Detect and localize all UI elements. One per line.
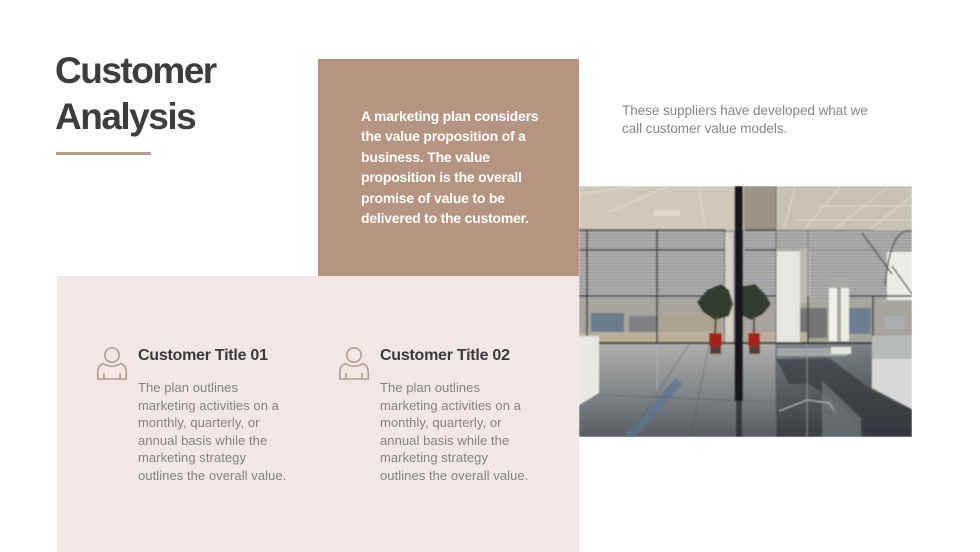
panel: value proposition	[318, 59, 579, 276]
card body 02: annual basis while the	[380, 432, 509, 448]
card body 01: outlines the overall value.	[138, 468, 286, 482]
icon: person 01	[97, 347, 127, 380]
supplier description: call customer value models.	[622, 120, 787, 136]
value proposition text: A marketing plan considers	[361, 108, 538, 124]
panel: pale background	[57, 276, 579, 552]
ceiling	[579, 186, 745, 231]
card heading 01: Customer Title 01	[138, 346, 268, 364]
photo: office lobby	[579, 186, 912, 437]
window frames	[579, 230, 912, 343]
window blinds	[579, 230, 912, 343]
title: Analysis	[55, 96, 195, 137]
value proposition text: delivered to the customer.	[361, 210, 529, 226]
title underline	[56, 152, 151, 155]
left and right desks	[579, 336, 599, 405]
card body 01	[138, 380, 286, 482]
card body 01: annual basis while the	[138, 432, 267, 448]
card body 02: outlines the overall value.	[380, 468, 528, 482]
plants	[697, 284, 733, 320]
card body 02: monthly, quarterly, or	[380, 415, 502, 430]
icon: person 02	[339, 347, 369, 380]
black column	[734, 186, 743, 401]
card: customer 01	[97, 346, 286, 482]
outdoor view	[591, 313, 624, 335]
card body 02	[380, 380, 528, 482]
card heading 02: Customer Title 02	[380, 346, 510, 364]
value proposition text: business. The value	[361, 149, 490, 165]
value proposition text: promise of value to be	[361, 190, 505, 206]
card body 01: marketing activities on a	[138, 398, 279, 412]
card body 02: marketing activities on a	[380, 398, 521, 412]
supplier description: These suppliers have developed what we	[622, 103, 868, 118]
value proposition text: proposition is the overall	[361, 169, 522, 185]
value proposition text: the value proposition of a	[361, 128, 526, 144]
card body 02: marketing strategy	[380, 450, 488, 465]
value proposition text	[361, 108, 538, 226]
bright glass reflections	[776, 251, 800, 344]
card: customer 02	[339, 346, 528, 482]
card body 01: monthly, quarterly, or	[138, 415, 260, 430]
card body 01: The plan outlines	[138, 380, 238, 395]
supplier description	[622, 103, 868, 136]
curved stand	[862, 231, 912, 294]
card body 01: marketing strategy	[138, 450, 246, 465]
floor	[579, 344, 776, 437]
title: Customer	[55, 50, 216, 91]
card body 02: The plan outlines	[380, 380, 480, 395]
title	[55, 50, 217, 137]
